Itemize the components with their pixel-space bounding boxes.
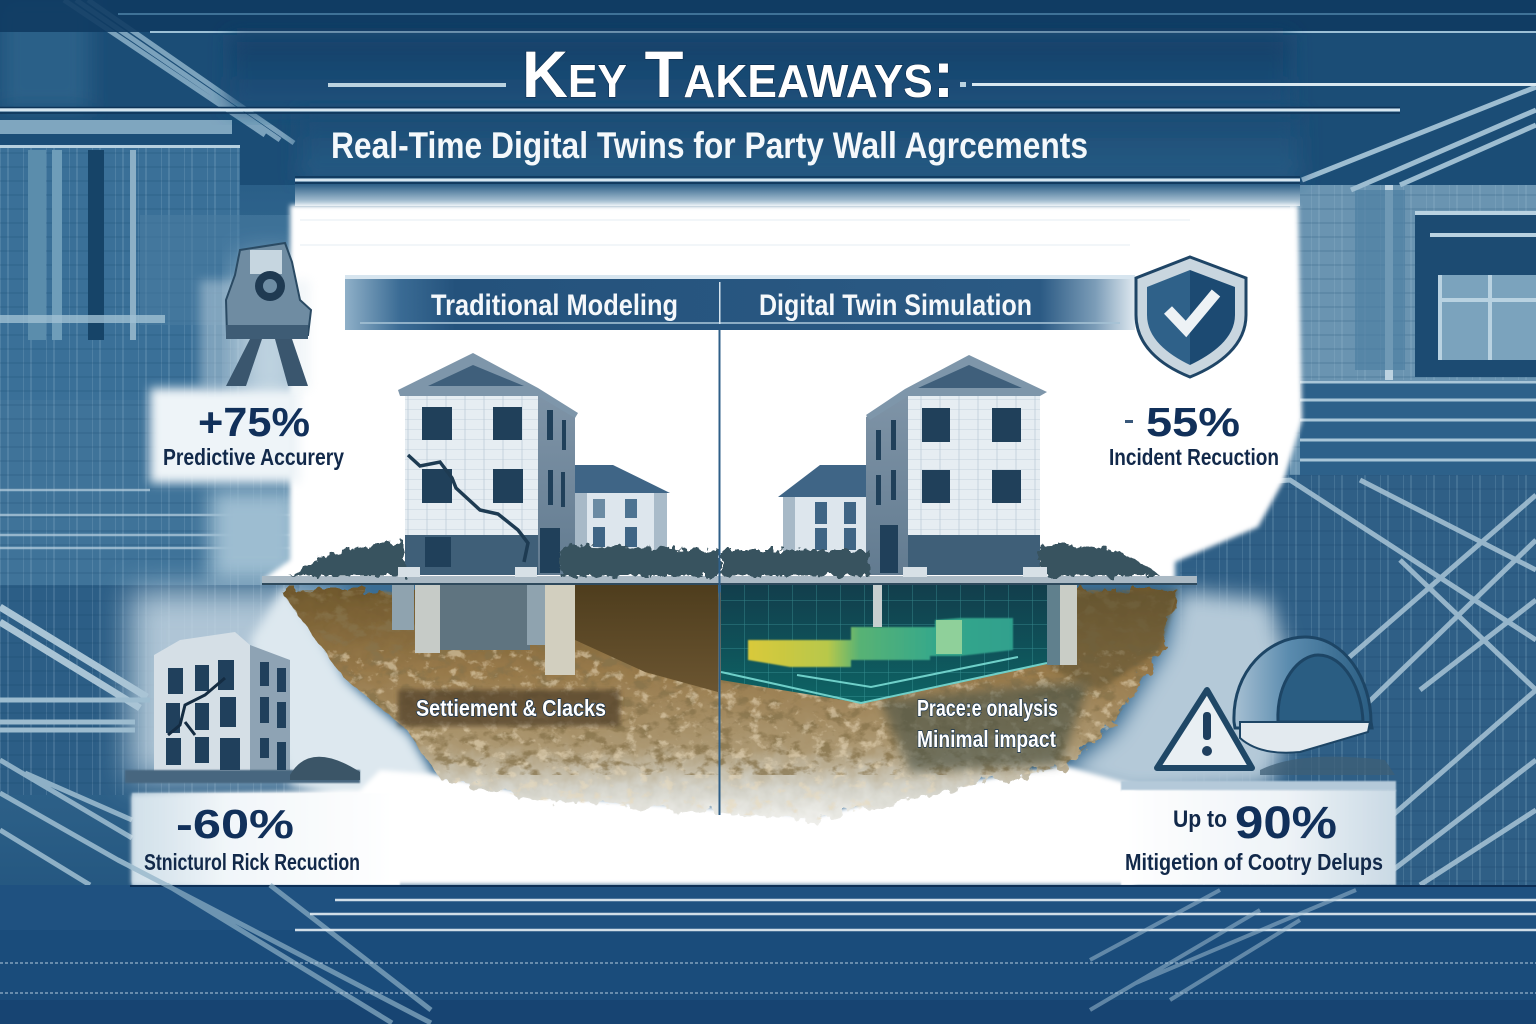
blueprint: middle left bbox=[0, 400, 431, 1023]
blueprint: upper left building bbox=[0, 0, 300, 410]
label: Predictive Accurery bbox=[163, 444, 344, 470]
main house bbox=[405, 393, 538, 535]
stat: structural risk reduction bbox=[125, 632, 360, 875]
icon: total station bbox=[226, 243, 311, 386]
analysis labels: Minimal impact bbox=[917, 726, 1056, 752]
digital twin grid bbox=[721, 585, 1077, 703]
label: Stnicturol Rick Recuction bbox=[144, 849, 360, 875]
label: Mitigetion of Cootry Delups bbox=[1125, 849, 1383, 875]
footer band bbox=[0, 860, 1536, 1024]
blueprint: lower right structure bbox=[1160, 475, 1536, 890]
icon: shield bbox=[1136, 257, 1246, 377]
ground slab bbox=[262, 576, 1197, 585]
value bbox=[1173, 797, 1337, 848]
value: +75% bbox=[198, 399, 310, 445]
label backing bbox=[398, 690, 620, 726]
centre divider bbox=[718, 330, 720, 815]
value: 55% bbox=[1146, 399, 1240, 445]
soil label: Settiement & Clacks bbox=[416, 695, 606, 721]
comparison header bar bbox=[345, 279, 1135, 330]
title: Key Takeaways: bbox=[522, 37, 954, 111]
value: 90% bbox=[1235, 797, 1337, 848]
label: digital twin simulation: Digital Twin Simulation bbox=[759, 289, 1032, 322]
hedges bbox=[722, 544, 1160, 576]
header band bbox=[0, 0, 1536, 206]
small rear building bbox=[575, 465, 670, 555]
title rules bbox=[328, 82, 1536, 87]
right house: digital twin simulation bbox=[721, 355, 1160, 752]
subtitle: Real-Time Digital Twins for Party Wall Agrcements bbox=[331, 125, 1088, 166]
label: traditional modeling: Traditional Modeling bbox=[431, 289, 678, 322]
left basement bbox=[392, 585, 718, 726]
hedges bbox=[290, 542, 720, 576]
crack bbox=[408, 455, 528, 562]
central white panel bbox=[132, 205, 1396, 885]
analysis labels: Prace:e onalysis bbox=[917, 695, 1058, 721]
main house bbox=[908, 394, 1040, 535]
lower left stat panel bbox=[132, 793, 400, 885]
label: Incident Recuction bbox=[1109, 444, 1279, 470]
left house: traditional modeling bbox=[290, 353, 720, 721]
value: -60% bbox=[176, 801, 294, 847]
blueprint: upper right building bbox=[1290, 87, 1536, 475]
stat: predictive accuracy bbox=[163, 243, 344, 470]
soil cross-section bbox=[270, 585, 1190, 820]
icon: helmet and warning bbox=[1157, 637, 1395, 775]
stat: incident reduction bbox=[1109, 257, 1279, 470]
haze around lower icons bbox=[250, 585, 1300, 800]
stat: mitigation of costly delays bbox=[1125, 637, 1395, 875]
icon: cracked building bbox=[125, 632, 360, 783]
analysis labels bbox=[917, 695, 1058, 752]
value: Up to bbox=[1173, 806, 1227, 833]
lower right stat panel bbox=[1121, 781, 1396, 885]
small rear building bbox=[778, 465, 871, 557]
